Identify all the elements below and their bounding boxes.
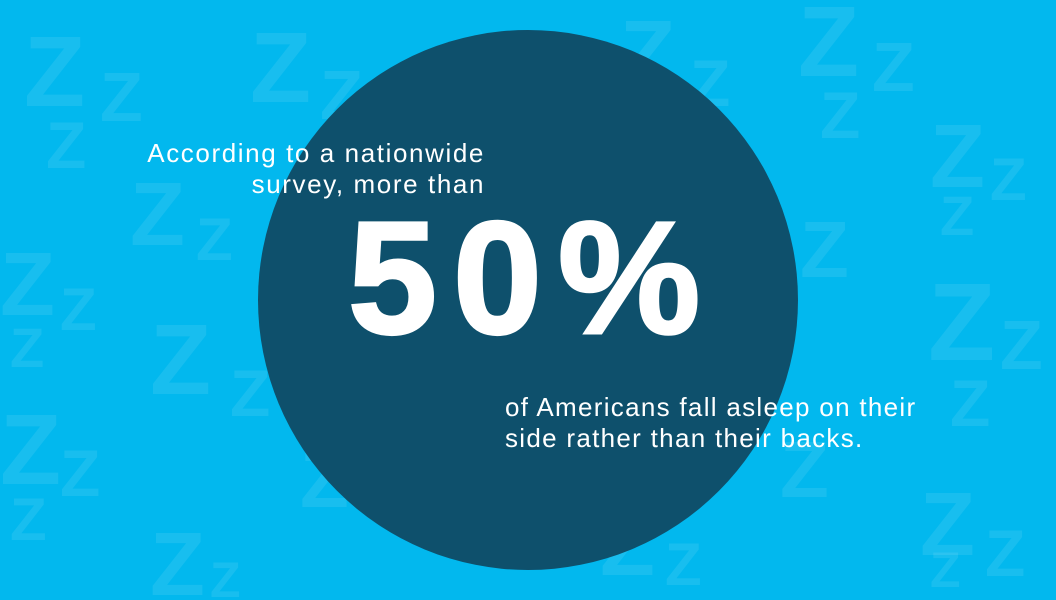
background pattern: z letters: Z — [320, 56, 363, 134]
background pattern: z letters: Z — [985, 516, 1025, 590]
background pattern: z letters: Z — [930, 107, 985, 207]
background pattern: z letters: Z — [940, 184, 974, 247]
dark circle — [258, 30, 798, 570]
background pattern: z letters: Z — [665, 531, 702, 598]
background pattern: z letters: Z — [820, 78, 860, 152]
background pattern: z letters: Z — [10, 316, 44, 379]
background pattern: z letters: Z — [950, 366, 990, 440]
background pattern: z letters: Z — [150, 304, 211, 416]
big stat: 50%: 50% — [348, 188, 716, 367]
intro text: survey, more than — [252, 169, 485, 199]
background pattern: z letters: Z — [300, 435, 349, 524]
background pattern: z letters: Z — [690, 46, 730, 120]
background pattern: z letters: Z — [100, 58, 143, 136]
background pattern: z letters: Z — [60, 436, 100, 510]
background pattern: z letters: Z — [920, 475, 975, 575]
background pattern: z letters: Z — [0, 235, 55, 335]
background pattern: z letters: Z — [620, 3, 675, 103]
background pattern: z letters: Z — [872, 28, 915, 106]
background pattern: z letters: Z — [0, 394, 61, 506]
background pattern: z letters: Z — [10, 486, 47, 553]
background pattern: z letters: Z — [780, 425, 829, 514]
background pattern: z letters: Z — [930, 542, 961, 598]
background pattern: z letters: Z — [130, 165, 185, 265]
background pattern: z letters: Z — [46, 108, 86, 182]
background pattern: z letters: Z — [250, 12, 311, 124]
closing text: side rather than their backs. — [505, 423, 864, 453]
background pattern: z letters: Z — [230, 356, 270, 430]
intro text: According to a nationwide — [147, 138, 485, 168]
background pattern: z letters: Z — [928, 261, 995, 384]
background pattern: z letters: Z — [60, 276, 97, 343]
background pattern: z letters: Z — [1000, 306, 1043, 384]
background pattern: z letters: Z — [196, 206, 233, 273]
intro text — [147, 138, 485, 199]
background pattern: z letters: Z — [990, 146, 1027, 213]
background pattern: z letters: Z — [600, 495, 655, 595]
background pattern: z letters: Z — [24, 16, 85, 128]
background pattern: z letters: Z — [800, 205, 849, 294]
closing text — [505, 392, 916, 453]
closing text: of Americans fall asleep on their — [505, 392, 916, 422]
